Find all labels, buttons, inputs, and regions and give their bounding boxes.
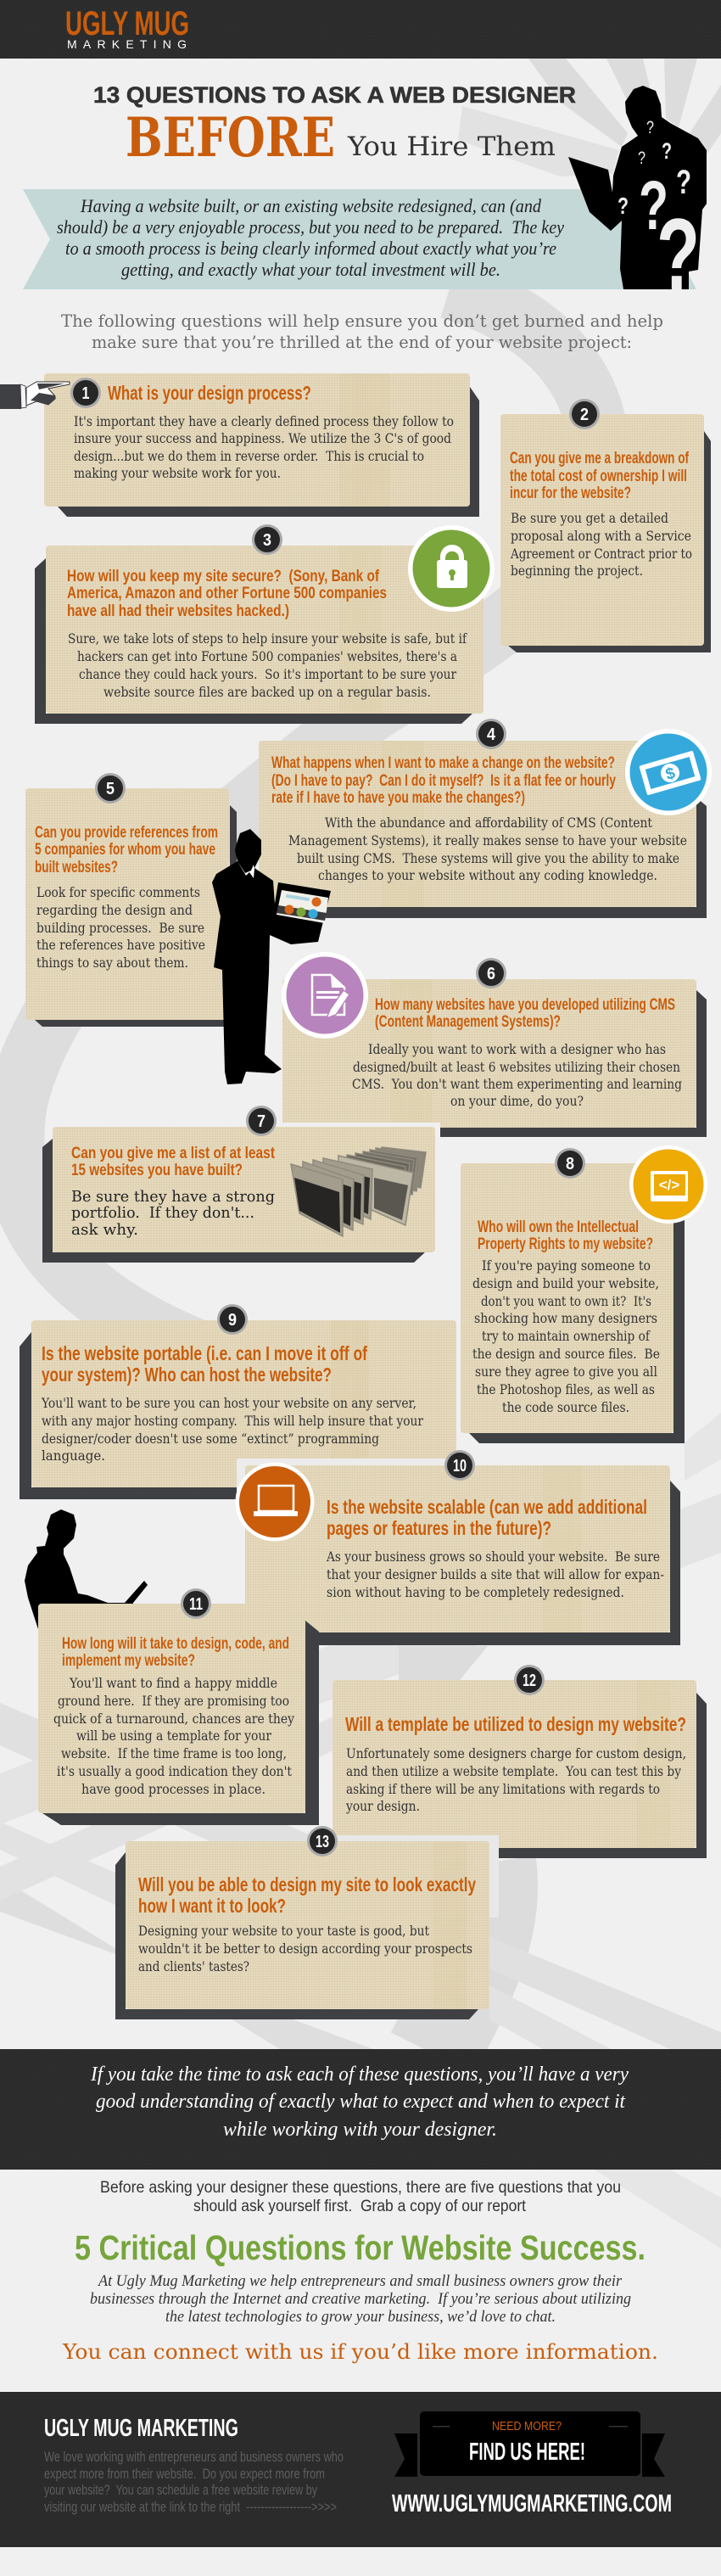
answer text: ask why. — [71, 1221, 138, 1239]
answer text — [41, 1396, 424, 1464]
answer text: If you're paying someone to — [482, 1258, 651, 1274]
answer text: asking if there will be any limitations with regards to — [346, 1782, 660, 1797]
question heading: America, Amazon and other Fortune 500 companies — [67, 585, 387, 602]
answer text: and clients' tastes? — [138, 1959, 249, 1974]
question heading: How long will it take to design, code, and — [62, 1635, 289, 1653]
answer text: You'll want to be sure you can host your website on any server, — [41, 1396, 416, 1411]
intro sentence — [61, 311, 663, 352]
question heading — [62, 1635, 289, 1670]
question heading: rate if I have to have you make the changes?) — [271, 789, 525, 807]
footer text — [44, 2450, 344, 2515]
silhouette: man with laptop and question marks — [568, 86, 707, 311]
number badge 12: 12 — [523, 1672, 536, 1690]
intro ribbon: should) be a very enjoyable process, but you need to be prepared. The key — [57, 216, 564, 238]
text block: about: the latest technologies to grow your business, we’d love to chat. — [165, 2308, 556, 2326]
icon: pointing hand — [0, 382, 70, 409]
footer text: visiting our website at the link to the right ------------------>>>> — [44, 2500, 337, 2515]
panel: conclusion band: good understanding of exactly what to expect and when to expect it — [96, 2091, 626, 2113]
silhouette: man with laptop and question marks: ? — [676, 164, 691, 201]
answer text: proposal along with a Service — [511, 529, 691, 544]
icon: dollar bill — [625, 729, 712, 815]
answer text: ground here. If they are promising too — [58, 1694, 289, 1709]
number badge 8 — [555, 1148, 585, 1179]
answer text: chance they could hack yours. So it's important to be sure your — [79, 667, 457, 682]
number badge 13 — [307, 1826, 338, 1856]
question heading — [35, 824, 218, 876]
answer text — [472, 1258, 660, 1415]
answer text: Unfortunately some designers charge for custom design, — [346, 1746, 686, 1761]
text block: about: businesses through the Internet and creative marketing. If you’re serious about utilizing — [90, 2290, 631, 2308]
question heading — [67, 568, 387, 620]
number badge 1: 1 — [81, 384, 90, 403]
answer text: designer/coder doesn't use some “extinct” programming — [42, 1431, 379, 1447]
answer text: beginning the project. — [511, 563, 643, 579]
question heading — [375, 996, 675, 1031]
number badge 13: 13 — [316, 1833, 329, 1851]
answer text: it's usually a good indication they don't — [57, 1764, 293, 1779]
answer text: that your designer builds a site that will allow for expan- — [327, 1567, 664, 1582]
answer text: You'll want to find a happy middle — [69, 1676, 277, 1691]
number badge 11 — [181, 1588, 211, 1619]
question heading: How will you keep my site secure? (Sony, Bank of — [67, 568, 380, 585]
answer text — [36, 885, 205, 971]
number badge 3 — [252, 524, 282, 555]
question heading: (Content Management Systems)? — [375, 1013, 561, 1031]
question heading: have all had their websites hacked.) — [67, 602, 289, 620]
answer text: design and build your website, — [472, 1276, 659, 1291]
logo: UGLY MUG — [65, 5, 189, 42]
answer text: try to maintain ownership of — [482, 1329, 651, 1344]
answer text: It's important they have a clearly defined process they follow to — [74, 414, 454, 429]
question heading: Property Rights to my website? — [478, 1235, 653, 1253]
silhouette: man with laptop and question marks: ? — [639, 167, 668, 244]
title — [93, 82, 576, 170]
answer text: CMS. You don't want them experimenting and learning — [352, 1077, 682, 1092]
number badge 4: 4 — [487, 725, 496, 744]
intro ribbon — [23, 189, 696, 289]
number badge 2: 2 — [580, 406, 589, 424]
answer text — [345, 1746, 686, 1814]
intro ribbon: Having a website built, or an existing website redesigned, can (and — [80, 195, 542, 216]
question heading — [138, 1873, 476, 1917]
panel: question 11 — [38, 1588, 319, 1825]
answer text: with any major hosting company. This will help insure that your — [42, 1414, 424, 1429]
answer text: portfolio. If they don't... — [71, 1204, 254, 1222]
image: stack of browser windows — [291, 1147, 426, 1236]
intro sentence: The following questions will help ensure you don’t get burned and help — [61, 311, 663, 331]
question heading: pages or features in the future)? — [327, 1517, 551, 1539]
panel: question 6 — [282, 952, 707, 1137]
number badge 6 — [476, 958, 506, 988]
number badge 1 — [70, 378, 101, 408]
answer text — [138, 1924, 472, 1974]
answer text — [352, 1042, 682, 1109]
question heading: 15 websites you have built? — [71, 1162, 243, 1179]
answer text: built using CMS. These systems will give you the ability to make — [297, 851, 679, 866]
answer text: website. If the time frame is too long, — [61, 1746, 287, 1761]
ribbon badge: find us here: NEED MORE? — [492, 2419, 562, 2433]
text block: report lead-in: should ask yourself first. Grab a copy of our report — [193, 2198, 527, 2215]
panel: conclusion band: If you take the time to ask each of these questions, you’ll have a very — [90, 2064, 629, 2086]
intro ribbon: to a smooth process is being clearly informed about exactly what you’re — [65, 238, 556, 259]
icon: padlock — [408, 525, 495, 612]
panel: question 9 — [20, 1304, 456, 1499]
answer text: Sure, we take lots of steps to help insure your website is safe, but if — [68, 631, 467, 647]
answer text: sion without having to be completely redesigned. — [327, 1585, 624, 1600]
answer text: will be using a template for your — [76, 1728, 272, 1744]
icon: dollar bill: $ — [663, 764, 678, 784]
number badge 3: 3 — [263, 531, 271, 550]
question heading — [327, 1496, 647, 1539]
number badge 8: 8 — [566, 1155, 574, 1173]
answer text: Be sure you get a detailed — [511, 511, 668, 526]
number badge 4 — [476, 719, 506, 749]
answer text — [510, 511, 692, 579]
panel: question 1 — [0, 373, 479, 517]
question heading: implement my website? — [62, 1652, 195, 1670]
answer text: and then utilize a website template. You can test this by — [346, 1764, 681, 1779]
number badge 10 — [444, 1450, 475, 1481]
panel: conclusion band: while working with your designer. — [223, 2119, 497, 2141]
answer text: design...but we do them in reverse order. This is crucial to — [74, 449, 424, 464]
answer text: regarding the design and — [36, 903, 193, 918]
answer text — [74, 414, 454, 481]
question heading: Will you be able to design my site to look exactly — [138, 1873, 476, 1896]
answer text: Management Systems), it really makes sense to have your website — [288, 833, 687, 848]
icon: document and pen — [282, 952, 368, 1039]
answer text: Look for specific comments — [36, 885, 200, 900]
silhouette: man with laptop and question marks: ? — [646, 118, 654, 137]
answer text: have good processes in place. — [81, 1782, 265, 1797]
number badge 11: 11 — [189, 1595, 203, 1614]
answer text: Agreement or Contract prior to — [510, 546, 692, 562]
question heading — [478, 1218, 653, 1253]
answer text: Ideally you want to work with a designer who has — [368, 1042, 666, 1057]
answer text: things to say about them. — [36, 955, 188, 971]
number badge 5 — [95, 773, 126, 804]
silhouette: man with laptop and question marks: ? — [618, 193, 629, 219]
answer text: building processes. Be sure — [36, 921, 204, 936]
panel: question 8 — [461, 1145, 707, 1443]
icon: laptop — [236, 1463, 314, 1541]
icon: code monitor — [629, 1145, 707, 1224]
panel: question 3 — [35, 524, 495, 724]
footer brand: UGLY MUG MARKETING — [44, 2415, 238, 2442]
question heading — [271, 754, 616, 807]
silhouette: man with laptop behind card 11 — [25, 1509, 148, 1629]
answer text: As your business grows so should your website. Be sure — [326, 1549, 660, 1565]
panel: question 13 — [115, 1826, 499, 2019]
header bar — [0, 0, 721, 59]
number badge 2 — [569, 399, 600, 429]
intro sentence: make sure that you’re thrilled at the end of your website project: — [92, 332, 632, 352]
answer text: shocking how many designers — [474, 1311, 657, 1326]
question heading: Who will own the Intellectual — [478, 1218, 639, 1236]
answer text: website source files are backed up on a regular basis. — [103, 685, 431, 700]
answer text: making your website work for you. — [74, 466, 281, 481]
icon: code monitor: </> — [659, 1177, 679, 1193]
text block: report lead-in: Before asking your designer these questions, there are five questions that you — [100, 2179, 621, 2197]
answer text: your design. — [345, 1799, 420, 1814]
number badge 6: 6 — [487, 965, 495, 983]
answer text: quick of a turnaround, chances are they — [53, 1711, 294, 1727]
answer text — [53, 1676, 294, 1797]
footer text: your website? You can schedule a free website review by — [44, 2483, 318, 2498]
intro ribbon: getting, and exactly what your total investment will be. — [121, 259, 500, 280]
silhouette: man with laptop and question marks: ? — [662, 138, 672, 164]
number badge 7 — [246, 1106, 277, 1136]
question heading: Can you give me a list of at least — [71, 1145, 276, 1162]
number badge 7: 7 — [257, 1112, 265, 1131]
text block: report lead-in — [100, 2179, 621, 2215]
answer text: Designing your website to your taste is good, but — [138, 1924, 430, 1939]
title: You Hire Them — [347, 132, 556, 162]
question heading: built websites? — [35, 859, 118, 876]
question heading: how I want it to look? — [138, 1895, 286, 1917]
footer text: expect more from their website. Do you expect more from — [44, 2467, 325, 2482]
silhouette: businessman holding tablet — [212, 829, 331, 1084]
number badge 9 — [217, 1304, 248, 1335]
question heading — [42, 1342, 367, 1386]
ribbon badge: find us here: FIND US HERE! — [469, 2439, 585, 2466]
title: 13 QUESTIONS TO ASK A WEB DESIGNER — [93, 82, 576, 108]
answer text: designed/built at least 6 websites utilizing their chosen — [353, 1060, 680, 1075]
answer text: wouldn't it be better to design according your prospects — [138, 1941, 472, 1957]
answer text: Be sure they have a strong — [71, 1188, 275, 1206]
question heading: incur for the website? — [510, 484, 631, 502]
answer text: don't you want to own it? It's — [481, 1294, 651, 1309]
silhouette: man with laptop and question marks: ? — [657, 198, 700, 311]
panel: question 5 — [25, 773, 237, 1027]
answer text: language. — [42, 1448, 105, 1464]
number badge 12 — [514, 1665, 545, 1695]
logo — [65, 5, 189, 51]
question heading: What is your design process? — [108, 382, 311, 404]
panel: conclusion band — [0, 2049, 721, 2170]
answer text — [68, 631, 467, 700]
question heading: your system)? Who can host the website? — [42, 1364, 332, 1386]
question heading — [510, 450, 689, 502]
title: BEFORE — [126, 106, 335, 170]
text block: about — [90, 2272, 631, 2326]
answer text: hackers can get into Fortune 500 companies' websites, there's a — [77, 649, 457, 664]
answer text: insure your success and happiness. We utilize the 3 C's of good — [74, 431, 451, 446]
ribbon badge: find us here — [394, 2411, 665, 2477]
call to action: You can connect with us if you’d like more information. — [62, 2340, 658, 2364]
answer text: the design and source files. Be — [472, 1347, 660, 1362]
panel: question 7 — [42, 1106, 440, 1263]
answer text: changes to your website without any coding knowledge. — [318, 868, 657, 883]
number badge 10: 10 — [453, 1457, 467, 1476]
answer text — [326, 1549, 664, 1600]
question heading: Can you provide references from — [35, 824, 218, 842]
panel: question 12 — [333, 1665, 707, 1858]
question heading: Is the website portable (i.e. can I move it off of — [42, 1342, 367, 1364]
answer text: on your dime, do you? — [450, 1094, 584, 1109]
answer text — [71, 1188, 275, 1239]
question heading: 5 companies for whom you have — [35, 841, 215, 859]
answer text: the code source files. — [502, 1400, 629, 1415]
text block: about: At Ugly Mug Marketing we help entrepreneurs and small business owners grow their — [97, 2272, 623, 2290]
answer text: With the abundance and affordability of CMS (Content — [325, 815, 653, 831]
silhouette: man with laptop and question marks: ? — [638, 148, 646, 168]
answer text: the references have positive — [36, 938, 205, 953]
question heading — [71, 1145, 276, 1179]
answer text — [288, 815, 687, 883]
number badge 9: 9 — [228, 1311, 237, 1330]
panel: footer — [0, 2392, 721, 2547]
answer text: sure they agree to give you all — [475, 1364, 657, 1380]
number badge 5: 5 — [106, 780, 115, 798]
panel: question 4 — [259, 719, 712, 918]
panel: question 10 — [236, 1450, 680, 1645]
panel: question 2 — [500, 399, 711, 652]
footer text: We love working with entrepreneurs and business owners who — [44, 2450, 344, 2465]
logo: MARKETING — [67, 37, 187, 51]
answer text: the Photoshop files, as well as — [477, 1382, 655, 1397]
